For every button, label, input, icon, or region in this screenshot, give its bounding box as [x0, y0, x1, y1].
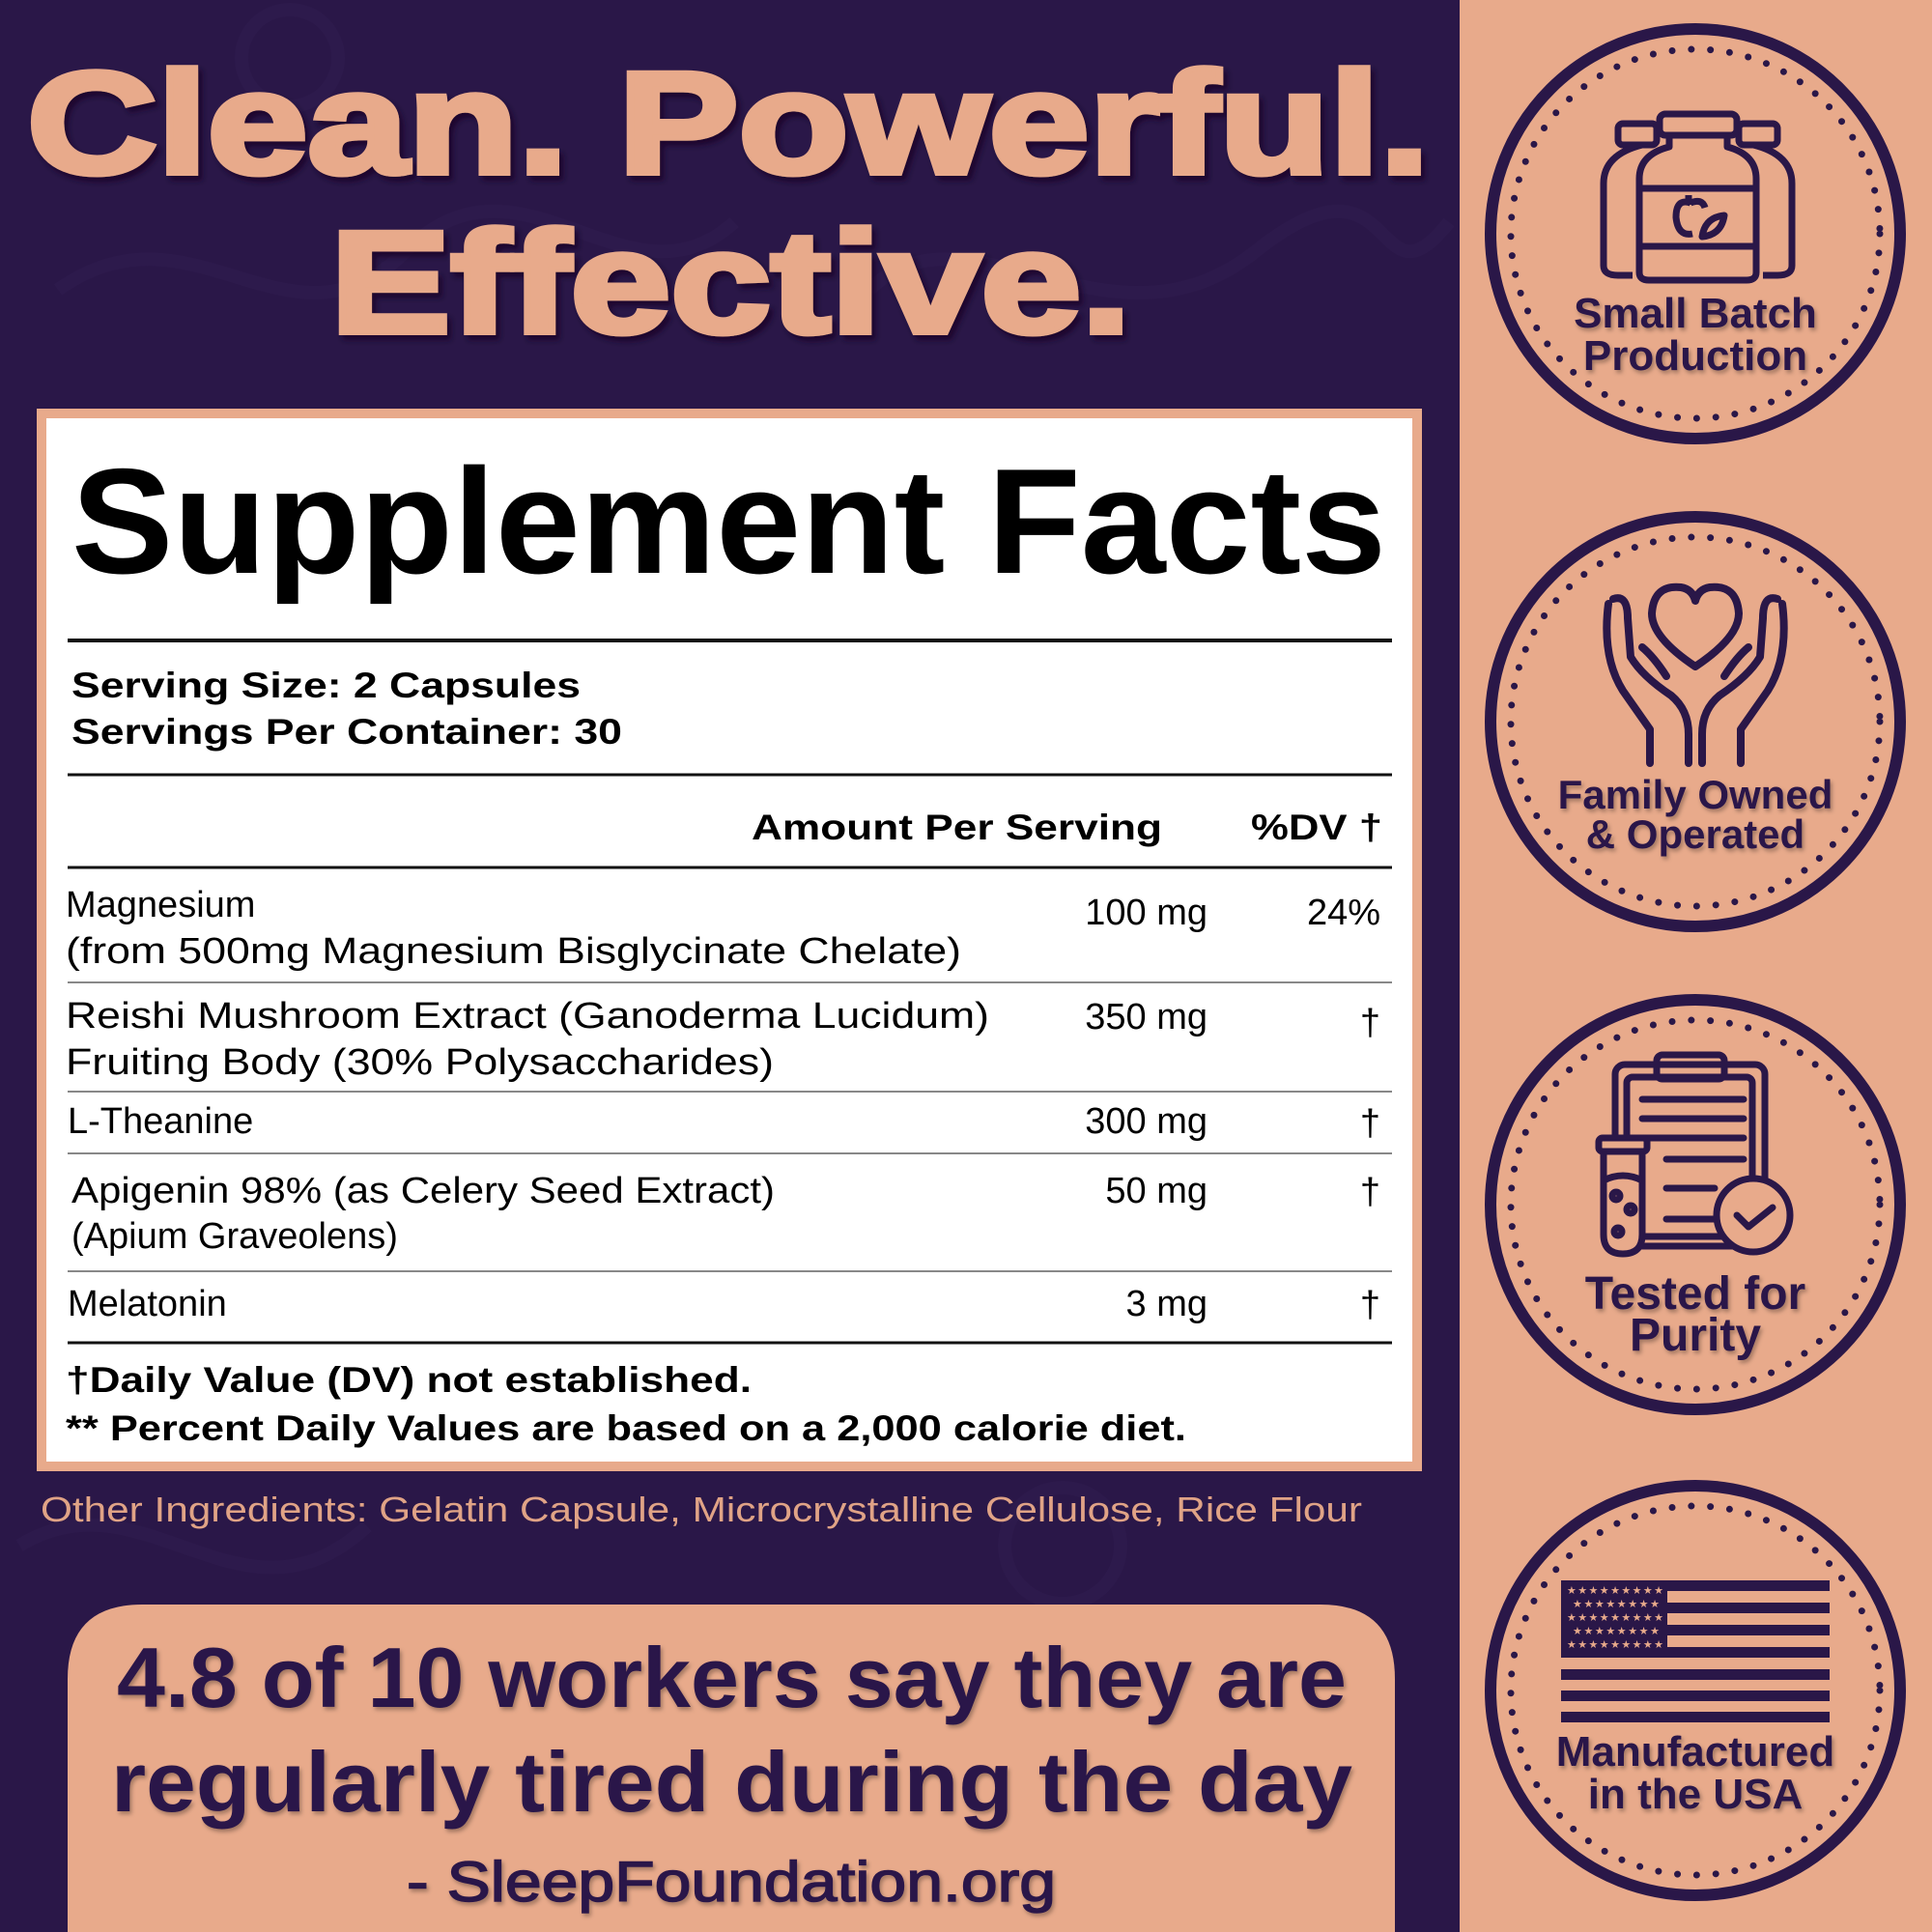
text: serving info: Servings Per Container: 30: [71, 712, 622, 752]
table header: [752, 808, 1382, 847]
text: badge label: [1585, 1268, 1805, 1361]
ingredient rows: 300 mg: [1085, 1101, 1208, 1142]
ingredient rows: Reishi Mushroom Extract (Ganoderma Lucidum): [66, 996, 989, 1037]
ingredient rows: †: [1360, 1103, 1380, 1144]
badge: small batch production: [1491, 29, 1900, 439]
text: badge label: in the USA: [1588, 1771, 1803, 1818]
badge: tested for purity: [1491, 1000, 1900, 1409]
text: serving info: Serving Size: 2 Capsules: [71, 666, 581, 705]
panel: supplement facts label: [42, 413, 1417, 1466]
icon: US flag: ★ ★ ★ ★ ★ ★ ★ ★: [1573, 1598, 1660, 1610]
title: Clean. Powerful.: [27, 42, 1430, 204]
ingredient rows: 50 mg: [1105, 1171, 1208, 1211]
text: badge label: Tested for: [1585, 1268, 1805, 1320]
icon: US flag: [1561, 1580, 1830, 1722]
ingredient rows: 3 mg: [1126, 1284, 1208, 1324]
callout: quote box: regularly tired during the day: [111, 1734, 1352, 1830]
title: [27, 42, 1430, 363]
heading: Supplement Facts: Supplement Facts: [71, 438, 1386, 605]
callout: quote box: - SleepFoundation.org: [407, 1851, 1056, 1914]
ingredient rows: †: [1360, 1285, 1380, 1325]
ingredient rows: Melatonin: [68, 1284, 227, 1324]
icon: US flag: ★ ★ ★ ★ ★ ★ ★ ★ ★: [1567, 1611, 1663, 1624]
text: badge label: & Operated: [1586, 811, 1804, 857]
icon: US flag: ★ ★ ★ ★ ★ ★ ★ ★ ★: [1567, 1638, 1663, 1651]
text: badge label: Purity: [1630, 1310, 1761, 1361]
text: badge label: Manufactured: [1556, 1728, 1834, 1776]
badge: manufactured in the USA: [1491, 1486, 1900, 1895]
table header: %DV †: [1251, 808, 1382, 847]
ingredient rows: L-Theanine: [68, 1101, 253, 1142]
ingredient rows: Apigenin 98% (as Celery Seed Extract): [71, 1171, 775, 1211]
callout: quote box: 4.8 of 10 workers say they are: [117, 1630, 1347, 1725]
icon: jars: [1604, 114, 1792, 280]
icon: clipboard and test tube: [1599, 1055, 1790, 1254]
text: badge label: Production: [1583, 332, 1807, 380]
text: serving info: [71, 666, 622, 752]
ingredient rows: 350 mg: [1085, 997, 1208, 1037]
ingredient rows: Fruiting Body (30% Polysaccharides): [66, 1042, 774, 1083]
ingredient rows: Magnesium: [66, 885, 255, 925]
text: badge label: [1558, 772, 1833, 857]
text: badge label: [1556, 1728, 1834, 1818]
callout: quote box: [68, 1605, 1395, 1932]
text: badge label: Small Batch: [1574, 290, 1817, 337]
footnotes: †Daily Value (DV) not established.: [66, 1360, 752, 1400]
footnotes: [66, 1360, 1186, 1448]
ingredient rows: †: [1360, 1172, 1380, 1212]
ingredient rows: [66, 885, 1392, 1325]
ingredient rows: 100 mg: [1085, 893, 1208, 933]
icon: US flag: ★ ★ ★ ★ ★ ★ ★ ★ ★: [1567, 1584, 1663, 1597]
icon: US flag: ★ ★ ★ ★ ★ ★ ★ ★: [1573, 1625, 1660, 1637]
badge: family owned: [1491, 517, 1900, 926]
text: badge label: [1574, 290, 1817, 380]
panel: right badge column: [1460, 0, 1932, 1932]
ingredient rows: 24%: [1307, 893, 1380, 933]
ingredient rows: (Apium Graveolens): [71, 1216, 398, 1257]
text: other ingredients: Other Ingredients: Gelatin Capsule, Microcrystalline Cellulose, Rice Flour: [41, 1490, 1362, 1529]
footnotes: ** Percent Daily Values are based on a 2,000 calorie diet.: [66, 1408, 1186, 1448]
text: badge label: Family Owned: [1558, 772, 1833, 817]
title: Effective.: [330, 201, 1131, 363]
ingredient rows: (from 500mg Magnesium Bisglycinate Chelate): [66, 931, 961, 972]
ingredient rows: †: [1360, 1003, 1380, 1043]
icon: hands with heart: [1606, 587, 1784, 763]
table header: Amount Per Serving: [752, 808, 1162, 847]
